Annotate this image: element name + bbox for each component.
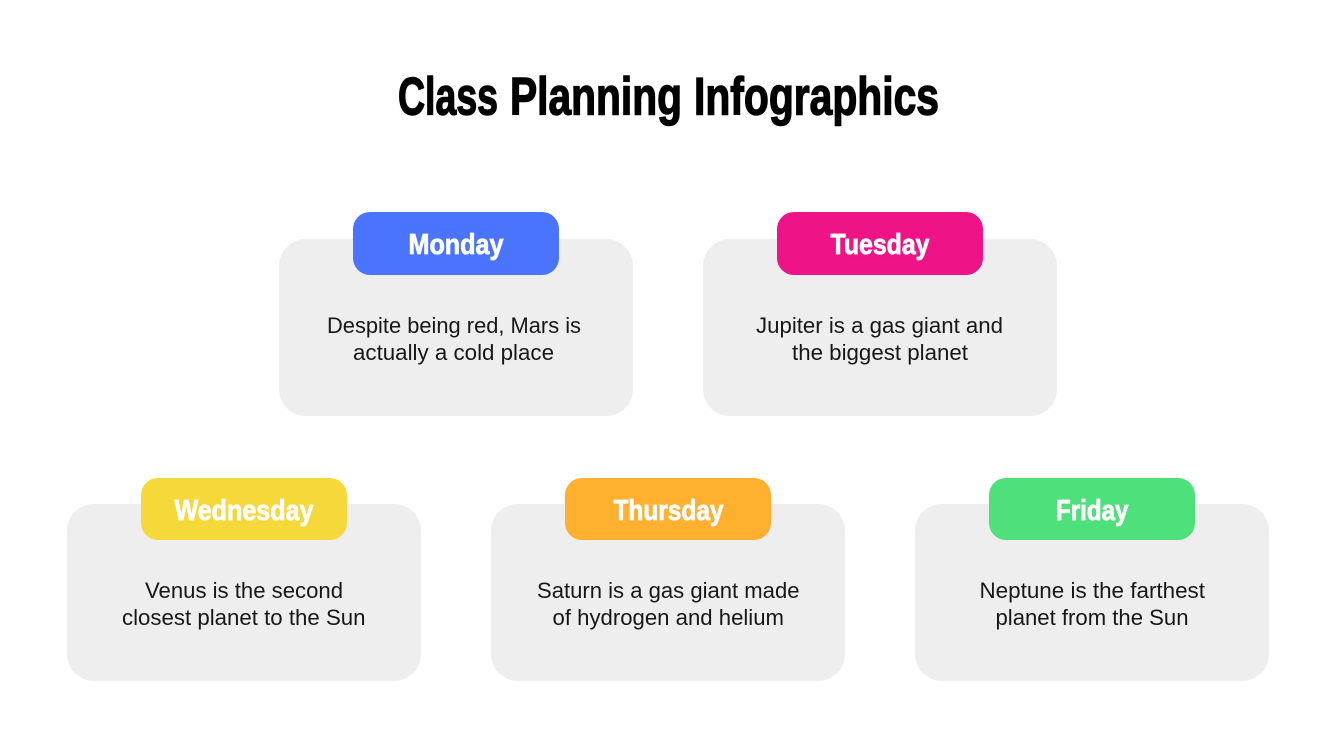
title: Planning: [510, 68, 682, 126]
Tuesday description: Jupiter is a gas giant and: [756, 313, 1003, 338]
Wednesday label pill: [141, 478, 347, 540]
Monday description: [327, 313, 581, 365]
Friday label: Friday: [1056, 495, 1128, 527]
Tuesday label pill: [777, 212, 983, 275]
panel: Monday: [279, 212, 633, 416]
Friday description: planet from the Sun: [996, 605, 1188, 630]
Monday label pill: [353, 212, 559, 275]
Thursday card background: [491, 504, 845, 681]
Wednesday label: Wednesday: [174, 495, 314, 527]
Friday label pill: [989, 478, 1195, 540]
Monday label: Monday: [408, 229, 504, 261]
Wednesday card background: [67, 504, 421, 681]
Tuesday description: the biggest planet: [792, 340, 968, 365]
title: Class: [398, 68, 498, 126]
Thursday description: [537, 578, 800, 630]
panel: Friday: [915, 478, 1269, 681]
Thursday description: of hydrogen and helium: [552, 605, 784, 630]
Tuesday card background: [703, 239, 1057, 416]
Tuesday label: Tuesday: [830, 229, 930, 261]
Thursday description: Saturn is a gas giant made: [537, 578, 800, 603]
Thursday label pill: [565, 478, 771, 540]
Wednesday description: [122, 578, 366, 630]
Wednesday description: closest planet to the Sun: [122, 605, 366, 630]
panel: Wednesday: [67, 478, 421, 681]
Thursday label: Thursday: [614, 495, 724, 527]
Monday description: Despite being red, Mars is: [327, 313, 581, 338]
Friday description: Neptune is the farthest: [980, 578, 1205, 603]
title: Infographics: [694, 68, 939, 126]
title: [398, 68, 939, 126]
Friday description: [980, 578, 1205, 630]
Tuesday description: [756, 313, 1003, 365]
Monday card background: [279, 239, 633, 416]
panel: Thursday: [491, 478, 845, 681]
Monday description: actually a cold place: [353, 340, 554, 365]
Friday card background: [915, 504, 1269, 681]
panel: Tuesday: [703, 212, 1057, 416]
Wednesday description: Venus is the second: [145, 578, 343, 603]
